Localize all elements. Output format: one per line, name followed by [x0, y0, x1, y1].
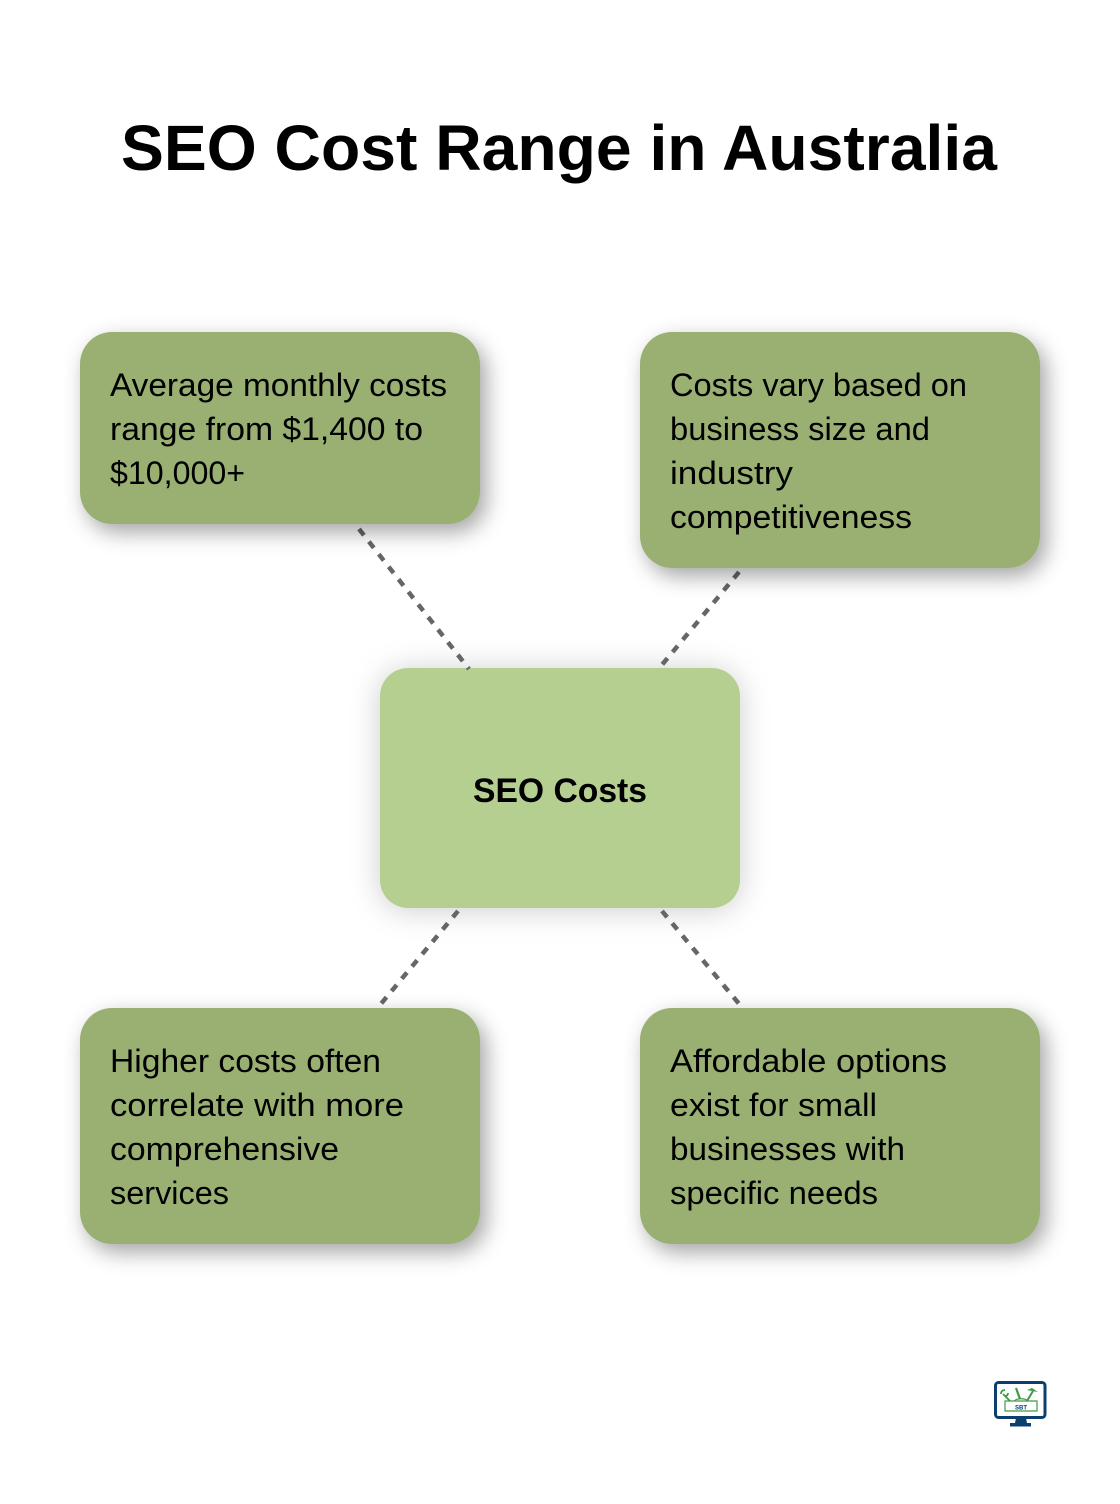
panel: higher costs: comprehensive	[110, 1131, 339, 1167]
panel: higher costs: Higher costs often	[110, 1043, 381, 1079]
panel: costs vary: industry	[670, 455, 793, 491]
panel: average monthly costs: $10,000+	[110, 455, 245, 491]
arrow: connector top left	[359, 529, 469, 669]
panel: costs vary: competitiveness	[670, 499, 912, 535]
panel: costs vary: Costs vary based on	[670, 367, 967, 403]
panel: center node shape	[380, 668, 740, 908]
panel: costs vary	[640, 332, 1040, 568]
arrow: connector top right	[661, 572, 739, 666]
arrow: connector bottom left	[380, 911, 458, 1005]
icon: monitor with toolbox logo: SBT	[1015, 1406, 1027, 1412]
panel: affordable options: specific needs	[670, 1175, 878, 1211]
center label: SEO Costs	[473, 772, 647, 810]
panel: average monthly costs: Average monthly costs	[110, 367, 447, 403]
panel: affordable options	[640, 1008, 1040, 1244]
panel: higher costs: services	[110, 1175, 229, 1211]
arrow: connector bottom right	[662, 911, 740, 1005]
panel: costs vary: business size and	[670, 411, 930, 447]
panel: average monthly costs: range from $1,400 to	[110, 411, 423, 447]
panel: average monthly costs	[80, 332, 480, 524]
panel: affordable options: businesses with	[670, 1131, 905, 1167]
panel: higher costs	[80, 1008, 480, 1244]
panel: affordable options: Affordable options	[670, 1043, 947, 1079]
title: SEO Cost Range in Australia	[121, 112, 997, 184]
icon: monitor with toolbox logo	[996, 1382, 1045, 1426]
panel: affordable options: exist for small	[670, 1087, 877, 1123]
panel: higher costs: correlate with more	[110, 1087, 404, 1123]
